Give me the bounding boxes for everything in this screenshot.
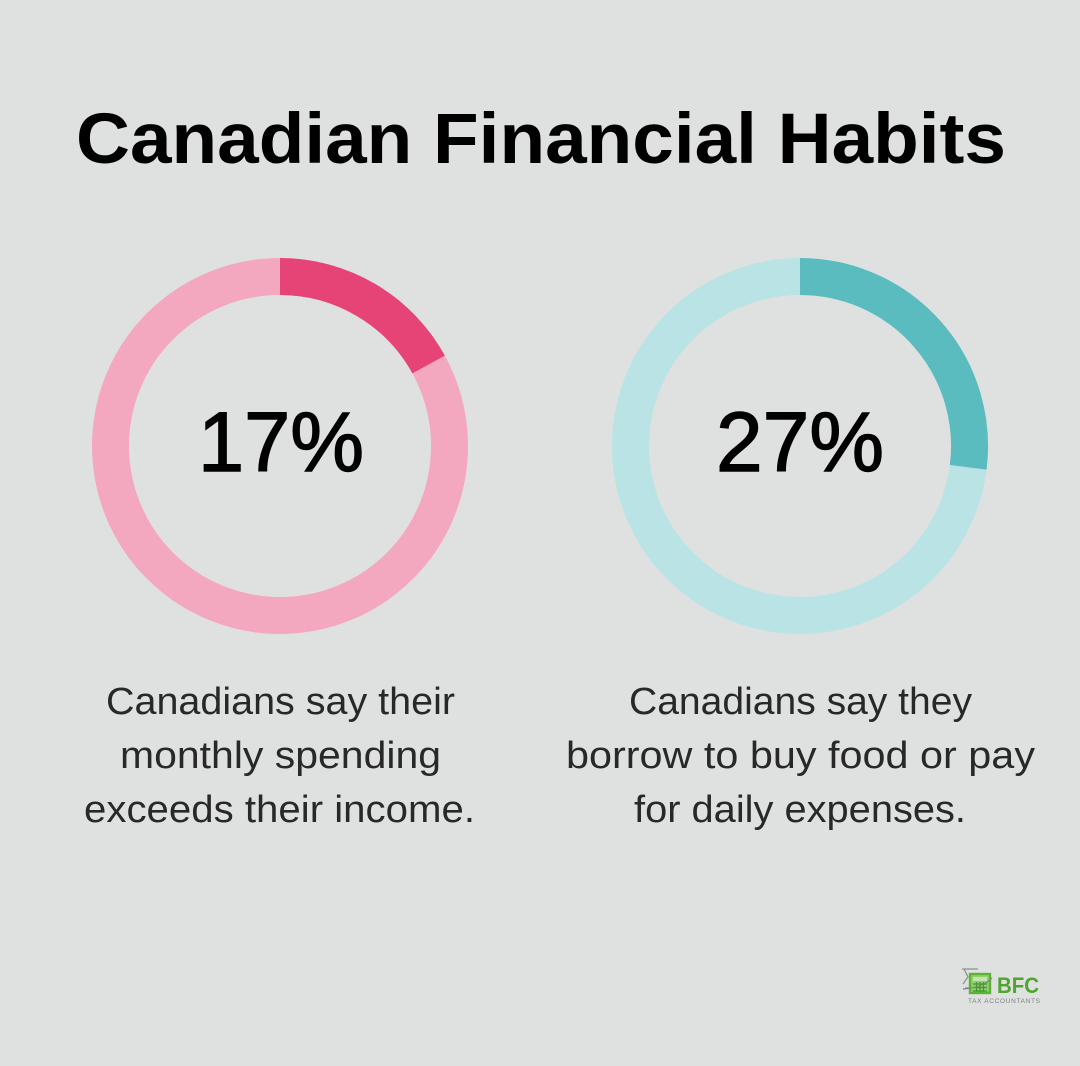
donut chart: 27%: 27% bbox=[716, 395, 884, 489]
text block: 27% description: borrow to buy food or pay bbox=[566, 735, 1035, 777]
text block: 17% description bbox=[84, 681, 475, 831]
logo: BFC Tax Accountants: TAX ACCOUNTANTS bbox=[968, 998, 1041, 1005]
text block: 17% description: Canadians say their bbox=[106, 681, 455, 723]
logo: BFC Tax Accountants bbox=[962, 969, 1041, 1005]
text block: 27% description: for daily expenses. bbox=[634, 789, 966, 831]
donut chart: 17% bbox=[110, 276, 450, 616]
donut chart: 17%: 17% bbox=[198, 395, 364, 489]
text block: 27% description bbox=[566, 681, 1035, 831]
title: Canadian Financial Habits bbox=[76, 100, 1006, 179]
logo: BFC Tax Accountants: BFC bbox=[997, 973, 1039, 998]
text block: 27% description: Canadians say they bbox=[629, 681, 972, 723]
text block: 17% description: exceeds their income. bbox=[84, 789, 475, 831]
text block: 17% description: monthly spending bbox=[120, 735, 441, 777]
donut chart: 27% bbox=[630, 276, 970, 616]
